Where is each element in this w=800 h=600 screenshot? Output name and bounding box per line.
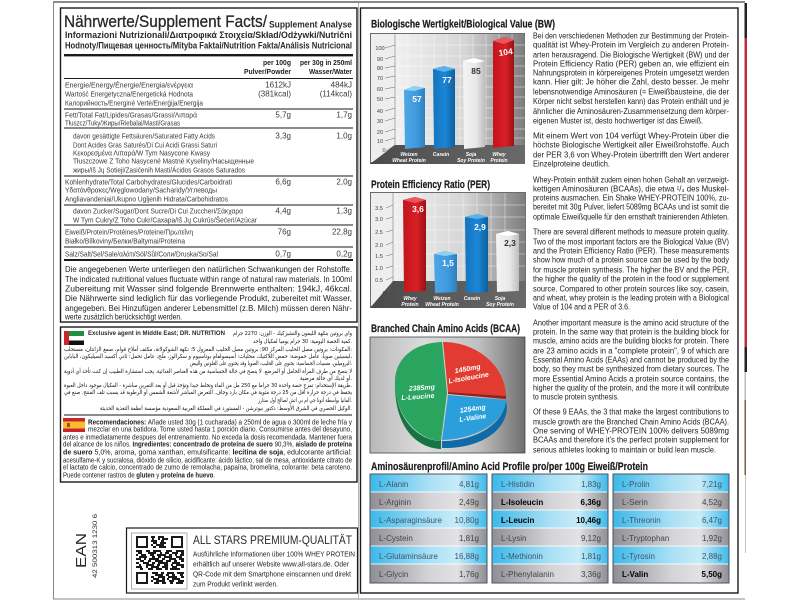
table: amino acids column 3: L-Threonin <box>622 516 661 525</box>
table: amino acids column 3: 4,52g <box>702 498 722 507</box>
row: protein: Eiweiß/Protein/Protéines/Proteine/Πρωτεΐνη <box>65 228 193 236</box>
text block: German BV: lebensnotwendige Aminosäuren (= Eiweißbausteine, die der <box>533 88 729 96</box>
table: amino acids column 2: L-Lysin <box>501 534 526 543</box>
spanish text <box>63 418 353 480</box>
arabic text: الوكيل الحصري في الشرق الأوسط: دكتور نيوترشن - المستورد في المملكة العربية السعودية مؤسسة أنظمة التغذية الحديثة. <box>100 404 352 412</box>
table: amino acids column 2 <box>492 474 608 583</box>
table: amino acids column 1: 4,81g <box>459 480 479 489</box>
row: protein <box>65 228 352 246</box>
bar: casein 77: 77 <box>442 75 452 85</box>
table: amino acids column 2: 6,36g <box>581 498 601 507</box>
table: amino acids column 1: 1,81g <box>459 534 479 543</box>
y axis labels: 100 <box>375 46 385 52</box>
y axis labels: 2.5 <box>375 230 383 236</box>
row: sugar: davon Zucker/Sugar/Dont Sucre/Di Cui Zuccheri/Σάκχαρα <box>73 206 244 216</box>
table: amino acids column 2: L-Histidin <box>501 480 534 489</box>
bar: wheat 57: 57 <box>412 94 422 104</box>
table: amino acids column 1: L-Arginin <box>379 498 411 507</box>
bar: whey 3,6: 3,6 <box>412 204 424 214</box>
table: amino acids column 1: L-Glycin <box>379 570 408 579</box>
table: amino acids column 3 <box>613 474 729 583</box>
icon: QR code <box>132 533 187 589</box>
bar chart: biological value <box>370 33 525 164</box>
heading: BCAA: Branched Chain Amino Acids (BCAA) <box>371 323 520 335</box>
title: Supplement Analyse <box>269 20 352 30</box>
side edge strip <box>744 3 747 553</box>
text block: German BV: Protein Efficiency Ratio (PER) geben an, wie effizient ein <box>533 60 729 68</box>
y axis labels: 50 <box>377 97 383 103</box>
row: carbohydrates: Υδατάνθρακες/Węglowodany/Sacharidy/Углеводы <box>65 186 217 194</box>
nutrition note <box>64 264 352 322</box>
icon: Spain flag <box>63 418 85 432</box>
row: salt: Salz/Salt/Sel/Sale/αλάτι/Sól/Sůl/Соли/Druska/So/Sal <box>65 250 218 258</box>
table: amino acids column 2: L-Leucin <box>501 516 534 525</box>
row: energy: Energie/Energy/Énergie/Energia/ενέργεια <box>65 80 194 90</box>
row: carbohydrates: Kohlenhydrate/Total Carbohydrates/Glucides/Carboidrati <box>65 178 232 186</box>
table: amino acids column 1: L-Asparaginsäure <box>379 516 443 525</box>
row: saturated fat: Κεκορεσμένα Λιπαρά/W Tym Nasycone Kwasy <box>73 148 210 158</box>
table: amino acids column 3: L-Serin <box>622 498 648 507</box>
spanish text: Puede contener rastros de gluten y proteína de huevo. <box>63 470 215 480</box>
text block: English protein quality: the higher the quality of the protein in the food or supplement <box>533 274 730 284</box>
bar: whey 104: 104 <box>498 46 514 58</box>
row: energy: 1612kJ <box>265 80 291 90</box>
barcode label EAN: 42 500313 1230 6 <box>92 514 99 578</box>
text block: English amino structure <box>533 318 730 402</box>
text block: German value: höchste Biologische Wertigkeit aller Eiweißrohstoffe. Auch <box>533 140 729 150</box>
text block: German BV: qualität ist Whey-Protein im Vergleich zu anderen Protein- <box>533 40 729 50</box>
x axis labels: Casein <box>464 296 480 302</box>
bar: whey 3,6 <box>403 197 426 292</box>
table: amino acids column 2: 1,83g <box>581 480 601 489</box>
row: saturated fat: Dont Acides Gras Saturés/Di Cui Acidi Grassi Saturi <box>73 140 217 150</box>
row: saturated fat: Tłuszczowe Z Toho Nasycené Mastné Kyseliny/Насыщенные <box>73 156 254 166</box>
spanish text: de suero 5,0%, aroma, goma xanthan, emulsificante: lecitina de soja, edulcorante artificial: <box>63 448 352 456</box>
barcode label EAN: EAN <box>74 533 90 568</box>
title: Nährwerte/Supplement Facts/ <box>64 12 267 31</box>
heading: biological value: Biologische Wertigkeit/Biological Value (BW) <box>371 18 555 30</box>
text block: English amino structure: more Essential Amino Acids a protein source contains, the <box>533 374 730 384</box>
text block: German value: Mit einem Wert von 104 verfügt Whey-Protein über die <box>533 132 730 140</box>
y axis labels: 1.0 <box>375 266 383 272</box>
heading: protein efficiency ratio: Protein Efficiency Ratio (PER) <box>371 179 490 191</box>
row: protein: Białko/Bílkoviny/Белки/Baltymai/Proteina <box>65 236 186 246</box>
slice: L-Leucine: L-Leucine <box>401 393 435 402</box>
row: sugar: W Tym Cukry/Z Toho Cukr/Сахара/Iš Jų Cukrūs/Šećeri/Azúcar <box>73 216 257 224</box>
bar: wheat 1,5 <box>434 251 457 293</box>
x axis labels: Casein <box>433 152 449 158</box>
table: amino acids column 3: 2,88g <box>702 552 722 561</box>
arabic text: المكونات: بروتين مصل الحليب المركز 90: بروتين مصل الحليب المعزول 5: نكهة الشوكولاتة، مكثف أملاح قوام، صمغ الزانثان، مستحلب: <box>64 345 352 353</box>
table: amino acids column 3: 6,47g <box>702 516 722 525</box>
premium text: zum Produkt verlinkt werden. <box>193 580 278 588</box>
arabic text: أو لديك أي حالة مرضية. <box>300 374 352 382</box>
table: amino acids column 2: 9,12g <box>581 534 601 543</box>
table: amino acids column 1: 1,76g <box>459 570 479 579</box>
table: amino acids column 1: 10,80g <box>455 516 479 525</box>
table: amino acids column 1: 16,88g <box>455 552 479 561</box>
spanish text: antes e inmediatamente despues del entrenamiento. No exceda la dosis recomendada. Mantener fuera <box>63 432 353 442</box>
y axis labels: 30 <box>377 119 383 125</box>
row: carbohydrates: 2,0g <box>336 178 352 186</box>
bar: soy 85: 85 <box>471 66 481 76</box>
text block: English BCAA: serious athletes looking to maintain or build lean muscle. <box>533 446 716 454</box>
y axis labels: 70 <box>377 76 383 82</box>
row: salt <box>65 250 352 258</box>
text block: English amino structure: Another important measure is the amino acid structure of the <box>533 318 729 328</box>
slice: L-Valine: L-Valine <box>459 413 487 424</box>
bar: casein 2,9 <box>465 214 488 293</box>
icon: UAE flag <box>64 331 84 345</box>
table: amino acids column 2: 3,36g <box>581 570 601 579</box>
bar: whey 104 <box>493 37 514 148</box>
spanish text: acesulfame-K y sucralosa, dióxido de silicio, acidificante: ácido láctico, sal de mesa, antioxidante citrato de <box>63 456 352 464</box>
text block: English BCAA: Of these 9 EAAs, the 3 that make the largest contributions to <box>533 408 729 416</box>
nutrition note: Die Nährwerte sind lediglich für das vorliegende Produkt, zubereitet mit Wasser, <box>65 293 352 303</box>
text block: German BCAA: Whey-Protein enthält zudem einen hohen Gehalt an verzweigt- <box>533 176 729 184</box>
y axis labels: 90 <box>377 57 383 63</box>
text block: English BCAA: muscle growth are the Branched Chain Amino Acids (BCAA). <box>533 418 729 426</box>
y axis labels: 60 <box>377 87 383 93</box>
row: saturated fat: davon gesättigte Fettsäuren/Saturated Fatty Acids <box>73 132 215 140</box>
spanish text: Recomendaciones: Añade usted 30g (1 cucharada) a 250ml de agua o 300ml de leche fría y <box>88 418 352 426</box>
row: energy: 484kJ <box>331 80 352 90</box>
row: fat: 5,7g <box>275 110 291 120</box>
text block: English protein quality: Value of 104 and a PER of 3.6. <box>533 302 630 312</box>
arabic text: يحفظ في درجة حرارة أقل من 25 درجة مئوية في مكان بارد وجاف. التعرض المباشر لأشعة الشمس أو الرطوبة قد يسبب تلف المنتج. صنع في <box>64 388 352 396</box>
text block: English protein quality: and the Protein Efficiency Ratio (PER). These measurements <box>533 246 729 256</box>
spanish text: mezclar en una batidora. Tome usted hasta 1 porción diario. Consumirse antes del desayuno, <box>88 424 352 434</box>
panel: distributor info <box>60 327 357 482</box>
table: amino acids column 2: L-Phenylalanin <box>501 570 554 579</box>
y axis labels: 3.0 <box>375 217 383 223</box>
table header <box>244 58 352 76</box>
bar chart: protein efficiency ratio <box>370 192 526 308</box>
table: amino acids column 1: L-Cystein <box>379 534 413 543</box>
table header: per 30g in 250ml <box>300 58 352 67</box>
table header: Pulver/Powder <box>244 67 291 76</box>
row: fat: Tłuszcz/Tuky/Жиры/Riebalai/Masti/Grasas <box>65 118 180 128</box>
row: energy: Wartość Energetyczna/Energetická Hodnota <box>65 90 194 98</box>
text block: German value: der PER 3,6 von Whey-Protein übertrifft den Wert anderer <box>533 150 729 160</box>
text block: German BV: ähnlicher die Aminosäuren-Zusammensetzung dem körper- <box>533 107 729 116</box>
table: amino acids column 3: 7,21g <box>702 480 722 489</box>
premium text: erhältlich auf unserer Website www.all-stars.de. Oder <box>193 560 349 568</box>
slice: L-Isoleucine: L-Isoleucine <box>448 372 490 386</box>
arabic text: كمية الحصة اليومية: 30 جرام يوميا لمكيال واحد. <box>253 338 352 345</box>
table: amino acids column 3: 1,92g <box>702 534 722 543</box>
y axis labels <box>375 193 393 297</box>
table rules <box>64 54 353 261</box>
row: fat <box>65 110 352 128</box>
row: carbohydrates: 6,6g <box>275 178 291 186</box>
spanish text: el lactato de calcio, concentrado de zumo de remolacha, papaína, bromelina, colorante: beta caroteno. <box>63 462 352 472</box>
table header: Wasser/Water <box>309 67 352 76</box>
text block: English amino structure: protein. In the same way that protein is the building block for <box>533 328 729 336</box>
table: amino acids column 1: L-Glutaminsäure <box>379 552 439 561</box>
row: energy: Калорийность/Energiné Vertė/Enerģija/Energija <box>65 98 204 108</box>
bar: soy 2,3 <box>496 231 519 292</box>
agent heading: Exclusive agent in Middle East; DR. NUTRITION <box>88 331 225 337</box>
divider rule <box>64 414 352 416</box>
x axis labels: Protein <box>401 302 419 308</box>
slice: L-Isoleucine <box>443 342 506 399</box>
x axis labels: Protein <box>490 158 508 164</box>
text block: English amino structure: muscle, amino acids are the building blocks for protein. There <box>533 336 729 346</box>
text block: English amino structure: are 23 amino acids in a "complete protein", 9 of which are <box>533 346 730 356</box>
table: amino acids column 1: 2,49g <box>459 498 479 507</box>
y axis labels: 80 <box>377 66 383 72</box>
text block: English amino structure: body, so they must be synthesized from dietary sources. The <box>533 364 729 374</box>
y axis labels: 0.5 <box>375 278 383 284</box>
row: saturated fat <box>73 132 352 174</box>
row: saturated fat: 3,3g <box>275 132 291 140</box>
row: protein: 22,8g <box>332 228 352 236</box>
text block: English protein quality <box>533 228 730 312</box>
text block: English protein quality: for muscle protein synthesis. The higher the BV and the PER, <box>533 266 729 274</box>
row: carbohydrates: Angliavandeniai/Ukupno Ugljenih Hidrata/Carbohidratos <box>65 194 228 204</box>
table: amino acids column 2: L-Isoleucin <box>501 498 543 507</box>
x axis labels: Weizen <box>433 296 451 302</box>
row: energy: (381kcal) <box>258 90 291 98</box>
table: amino acids column 3: L-Prolin <box>622 480 650 489</box>
bar: wheat 57 <box>404 86 425 149</box>
table: amino acids column 2: L-Methionin <box>501 552 543 561</box>
nutrition note: The indicated nutritional values fluctuate within range of natural raw materials. In 100ml <box>65 274 352 284</box>
y axis labels <box>375 34 395 154</box>
text block: German BV: Nahrungsprotein in körpereigenes Protein umgesetzt werden <box>533 68 729 78</box>
y axis labels: 0 <box>382 291 386 297</box>
text block: English protein quality: and wheat, whey protein is the leading protein with a Biological <box>533 294 729 302</box>
nutrition note: Die angegebenen Werte unterliegen den natürlichen Schwankungen der Rohstoffe. <box>65 264 352 274</box>
table: amino acids column 2: 1,81g <box>581 552 601 561</box>
y axis labels: 20 <box>377 130 383 136</box>
premium heading: ALL STARS PREMIUM-QUALITÄT <box>193 535 352 547</box>
text block: English BCAA <box>533 408 729 454</box>
text block: English protein quality: show how much of a protein source can be used by the body <box>533 256 729 264</box>
pie chart: BCAA <box>370 337 525 453</box>
panel: QR and premium quality <box>126 528 358 593</box>
x axis labels: Soja <box>466 152 476 158</box>
text block: English protein quality: There are several different methods to measure protein quality. <box>533 228 729 236</box>
premium text: Ausführliche Informationen über 100% WHEY PROTEIN <box>193 550 355 558</box>
nutrition note: Zubereitung mit Wasser sind folgende Brennwerte enthalten: 194kJ, 46kcal. <box>65 284 352 294</box>
row: fat: Fett/Total Fat/Lipides/Grasas/Grassi/Λιπαρά <box>65 110 198 120</box>
text block: German value <box>533 132 730 168</box>
barcode label EAN <box>74 514 99 578</box>
y axis labels: 3.5 <box>375 206 383 212</box>
text block: German BCAA: proteins ausmachen. Ein Shake WHEY-PROTEIN 100%, zu- <box>533 194 729 202</box>
text block: German BV: arten herausragend. Die Biologische Wertigkeit (BW) und der <box>533 50 729 60</box>
x axis labels <box>401 296 514 308</box>
text block: English amino structure: higher the quality of the protein, and the more it will contribute <box>533 384 729 392</box>
row: sugar <box>73 206 352 224</box>
table header: per 100g <box>263 58 291 67</box>
text block: German BV: kann. Hier gilt: Je höher die Zahl, desto besser. Je mehr <box>533 78 729 86</box>
slice: L-Leucine: 2385mg <box>408 384 436 393</box>
table: amino acids column 2: 10,46g <box>576 516 601 525</box>
row: salt: 0,2g <box>336 250 352 258</box>
text block: German BV: Körper nicht selbst herstellen kann) das Protein enthält und je <box>533 97 729 106</box>
text block: German value: Einzelproteine deutlich. <box>533 160 610 168</box>
arabic text: ألمانيا بواسطة أنونا جي ام بي اتش لصالح أول ستارز. <box>257 396 352 404</box>
text block: German BCAA: optimale Eiweißquelle für den ernsthaft trainierenden Athleten. <box>533 212 729 222</box>
arabic text: طريقة الإستخدام: تمزج حصة واحدة 30 جراما مع 250 مل من الماء وتخلط جيدا وتؤخذ قبل أو بعد التمرين مباشرة - المكيال موجود داخل العبوة. <box>64 381 352 389</box>
row: salt: 0,7g <box>275 250 291 258</box>
slice: L-Isoleucine: 1450mg <box>454 364 482 375</box>
text block: English BCAA: One serving of WHEY-PROTEIN 100% delivers 5089mg <box>533 426 729 436</box>
text block: English protein quality: source. Compared to other protein sources like soy, casein, <box>533 284 729 294</box>
x axis labels: Soy Protein <box>457 158 485 164</box>
premium text: QR-Code mit dem Smartphone einscannen und direkt <box>193 570 352 578</box>
text block: German BCAA: kettigen Aminosäuren (BCAAs), die etwa ¹/₃ des Muskel- <box>533 184 729 194</box>
pie rim <box>395 382 441 449</box>
row: energy: (114kcal) <box>320 90 352 98</box>
y axis labels: 0 <box>382 148 386 154</box>
x axis labels: Wheat Protein <box>392 158 426 164</box>
bar: casein 77 <box>433 66 455 149</box>
slice: L-Valine <box>442 395 506 440</box>
premium text <box>193 550 355 588</box>
nutrition note: angegeben. Bei Hinzufügen anderer Lebensmittel (z.B. Milch) müssen deren Nähr- <box>65 303 352 313</box>
arabic text: واي بروتين بنكهة الليمون والتشيزكيك - الوزن: 2270 جرام <box>233 330 352 337</box>
table: amino acids column 3: L-Tryptophan <box>622 534 669 543</box>
x axis labels: Weizen <box>400 152 418 158</box>
y axis labels: 10 <box>377 139 383 145</box>
row: saturated fat: 1,0g <box>336 132 352 140</box>
arabic text <box>64 330 352 412</box>
x axis labels: Wheat Protein <box>425 302 459 308</box>
x axis labels: Soja <box>495 296 505 302</box>
slice: L-Valine: 1254mg <box>459 404 487 415</box>
row: sugar: 1,3g <box>336 206 352 216</box>
nutrition note: werte zusätzlich berücksichtigt werden. <box>64 312 182 322</box>
text block: English protein quality: Two of the most important factors are the Biological Value (BV) <box>533 238 729 246</box>
text block: German BV: Bei den verschiedenen Methoden zur Bestimmung der Protein- <box>533 32 729 40</box>
arabic text: لا ينصح من طرف المرأة الحامل أو المرضع. لا ينصح في حالة الحساسية من هذه العناصر الغذائية. يجب استشارة الطبيب إن كنت تأخذ أي أدوية <box>64 367 352 375</box>
panel: nutrition facts <box>60 8 357 322</box>
text block: English amino structure: to muscle protein synthesis. <box>533 392 619 402</box>
table: amino acids column 3: L-Valin <box>622 570 648 579</box>
x axis labels: Whey <box>492 152 506 158</box>
table: amino acids column 3: L-Tyrosin <box>622 552 655 561</box>
y axis labels: 40 <box>377 109 383 115</box>
x axis labels <box>392 152 508 164</box>
text block: English amino structure: Essential Amino Acids (EAAs) and cannot be produced by the <box>533 356 729 364</box>
row: saturated fat: жиры/Iš Jų Sotieji/Zasićenih Masti/Ácidos Grasos Saturados <box>73 166 245 174</box>
bar: soy 85 <box>463 58 485 149</box>
panel: protein information <box>360 8 738 593</box>
y axis labels: 2.0 <box>375 243 383 249</box>
text block: German BCAA: bereitet mit 30g Pulver, liefert 5089mg BCAAs und ist somit die <box>533 202 729 212</box>
arabic text: البروميلين، مسببات الحساسية: يحتوي على الحليب، الصويا وقد يحتوي على الغلوتين والبيض. <box>190 361 352 367</box>
x axis labels: Soy Protein <box>486 302 514 308</box>
table: amino acids column 1: L-Alanin <box>379 480 408 489</box>
text block: German BCAA <box>533 176 729 222</box>
table: amino acids column 1 <box>370 474 487 583</box>
bar: soy 2,3: 2,3 <box>504 238 516 248</box>
title: Hodnoty/Пищевая ценность/Mityba Faktai/Nutrition Fakta/Análisis Nutricional <box>65 40 352 50</box>
text block: German BV: eigenen Muster ist, desto hochwertiger ist das Eiweiß. <box>533 116 703 126</box>
text block: English BCAA: BCAAs and therefore it's the perfect protein supplement for <box>533 436 729 444</box>
text block: German BV <box>533 32 729 126</box>
slice: L-Leucine <box>395 342 447 441</box>
row: energy <box>65 80 352 108</box>
spanish text: del alcance de los niños. Ingredientes: concentrado de proteína de suero 90,3%, aislado de proteína <box>63 440 353 448</box>
row: protein: 76g <box>278 228 291 236</box>
bar: wheat 1,5: 1,5 <box>442 258 454 268</box>
table: amino acids column 3: 5,50g <box>702 570 722 579</box>
bar: casein 2,9: 2,9 <box>474 222 486 232</box>
row: carbohydrates <box>65 178 352 204</box>
y axis labels: 1.5 <box>375 254 383 260</box>
arabic text: ليسيثين صويا، عامل حموضة: حمض اللاكتيك، محليات: أسيسولفام بوتاسيوم و سكرالوز، ملح، عامل تحمل: ثاني أكسيد السيليكون، الباباين، <box>64 352 352 360</box>
heading: amino acid profile: Aminosäurenprofil/Amino Acid Profile pro/per 100g Eiweiß/Protein <box>371 461 648 473</box>
title: Informazioni Nutrizionali/Διατροφικά Στοιχεία/Skład/Odżywki/Nutrični <box>65 30 352 40</box>
row: fat: 1,7g <box>336 110 352 120</box>
x axis labels: Whey <box>403 296 417 302</box>
row: sugar: 4,4g <box>275 206 291 216</box>
title <box>64 12 352 50</box>
